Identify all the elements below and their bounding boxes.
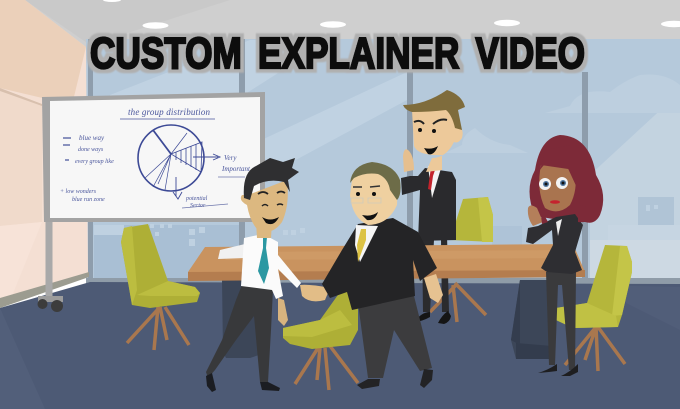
shoes <box>357 369 433 389</box>
hair <box>350 162 401 200</box>
trousers <box>206 285 273 382</box>
floor <box>0 282 680 409</box>
head <box>350 163 398 225</box>
shoes <box>415 311 451 324</box>
shoes <box>206 373 280 392</box>
chart labels: Sector <box>190 203 206 209</box>
jacket <box>401 168 456 241</box>
trousers <box>358 296 432 378</box>
jacket <box>526 214 583 274</box>
shirt <box>241 234 301 299</box>
shirt and red tie <box>428 165 442 198</box>
left wall <box>0 0 89 308</box>
face <box>539 165 576 211</box>
chair: back middle <box>430 197 493 322</box>
shirt collar <box>556 219 562 236</box>
heels <box>538 364 578 376</box>
shirt and yellow tie <box>355 225 378 262</box>
table pedestal left <box>222 280 262 358</box>
chair: front center <box>283 288 358 390</box>
ceiling <box>0 0 680 60</box>
paper on table <box>218 244 245 259</box>
pie chart sketch <box>138 125 220 199</box>
lips <box>550 200 560 204</box>
hair lock <box>540 206 594 224</box>
hand <box>528 206 543 226</box>
board notes: + low wonders <box>60 189 97 195</box>
legs <box>422 235 449 312</box>
hair fringe <box>540 145 590 190</box>
table <box>188 244 585 359</box>
eyes <box>539 177 568 190</box>
whiteboard <box>38 92 265 312</box>
chair: right <box>556 245 632 371</box>
board heading: the group distribution <box>128 107 210 117</box>
handshake hands <box>300 285 330 301</box>
spiky hair <box>244 158 299 200</box>
board notes <box>60 134 114 203</box>
lower hand <box>278 298 288 326</box>
board notes: blue way <box>79 134 105 142</box>
chart labels <box>182 154 251 209</box>
window with sky <box>86 39 680 285</box>
character: young man in white shirt <box>206 158 301 392</box>
raised hand <box>403 149 414 172</box>
board notes: done ways <box>78 147 104 153</box>
board notes: every group like <box>75 159 114 165</box>
face and glasses <box>351 186 381 220</box>
right hand <box>424 274 443 303</box>
hair <box>403 90 465 130</box>
character: woman with red hair <box>526 135 603 376</box>
character: older man in dark suit <box>300 162 443 389</box>
title: CUSTOM EXPLAINER VIDEO <box>90 29 585 78</box>
board notes: blue run zone <box>72 197 105 203</box>
chair: left <box>121 224 200 350</box>
face details <box>414 120 447 154</box>
trousers <box>546 272 576 370</box>
table pedestal right <box>511 280 552 359</box>
chart labels: Important <box>221 165 251 173</box>
whiteboard stand <box>38 218 63 312</box>
chart labels: Very <box>224 154 237 162</box>
face details <box>258 192 285 224</box>
tie <box>258 237 269 284</box>
neck and head <box>241 180 288 238</box>
jacket <box>322 218 437 310</box>
chart labels: potential <box>185 196 208 202</box>
neck and head <box>412 106 463 172</box>
clouds <box>445 74 680 153</box>
ceiling lights <box>103 0 680 29</box>
window mullions <box>88 39 588 284</box>
hair back <box>530 135 603 223</box>
city buildings <box>94 197 680 281</box>
character: standing man in suit <box>401 90 465 324</box>
